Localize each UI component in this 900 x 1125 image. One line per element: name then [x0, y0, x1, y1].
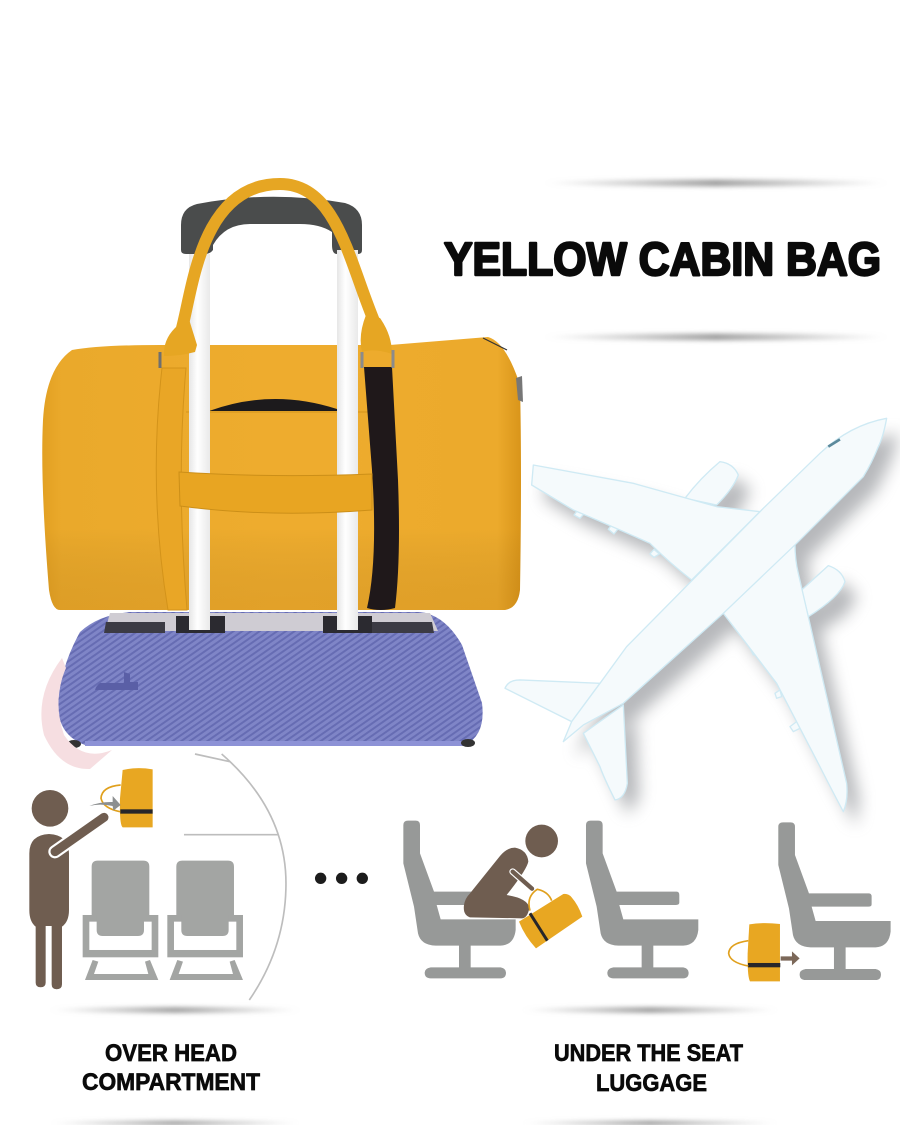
- yellow sleeve strap: [179, 472, 372, 513]
- side strap seam: [156, 368, 187, 610]
- metal rings: [158, 352, 162, 368]
- lower edge highlight: [85, 741, 465, 746]
- seat side 1: [403, 821, 516, 978]
- zip puller: [483, 338, 507, 350]
- small bag upright: [89, 768, 153, 827]
- caption text: [554, 1040, 743, 1097]
- dots: [315, 873, 368, 884]
- cockpit detail: [828, 439, 840, 447]
- caption: overhead compartment: [50, 1007, 300, 1125]
- bracket marks: [104, 622, 434, 633]
- suitcase: [58, 612, 483, 748]
- bending person: [464, 825, 558, 918]
- seat front 1: [83, 861, 158, 980]
- black shoulder strap: [364, 367, 399, 610]
- bag handle: [160, 184, 393, 368]
- side handle: [95, 672, 138, 690]
- wheels: [67, 740, 81, 748]
- standing person: [29, 790, 104, 989]
- caption text: LUGGAGE: [596, 1070, 707, 1097]
- trolley handle: [181, 197, 362, 254]
- top recess: [105, 613, 438, 631]
- caption: under the seat: [522, 1007, 778, 1125]
- right side hardware: [516, 376, 523, 402]
- seat side 2: [586, 821, 698, 978]
- tilted bag: [519, 889, 582, 948]
- caption text: [82, 1040, 260, 1096]
- gray arrow: [89, 796, 121, 811]
- brown arrow: [781, 951, 800, 965]
- overhead compartment scene: [29, 754, 368, 1000]
- caption text: UNDER THE SEAT: [554, 1040, 743, 1067]
- caption text: COMPARTMENT: [82, 1069, 260, 1096]
- under seat scene: [403, 821, 891, 981]
- small bag with arrow: [729, 923, 800, 981]
- seat front 2: [167, 861, 243, 980]
- plane shadow: [544, 433, 899, 826]
- pink luggage strap: [41, 658, 112, 769]
- title panel: [444, 180, 888, 340]
- seat side 3: [778, 822, 891, 980]
- airplane: [505, 418, 899, 826]
- trolley rails: [189, 250, 358, 630]
- pocket opening: [209, 399, 337, 411]
- cabin outline: [184, 754, 286, 1000]
- caption text: OVER HEAD: [105, 1040, 237, 1067]
- duffel bag body: [42, 337, 523, 610]
- plane body: [505, 418, 887, 812]
